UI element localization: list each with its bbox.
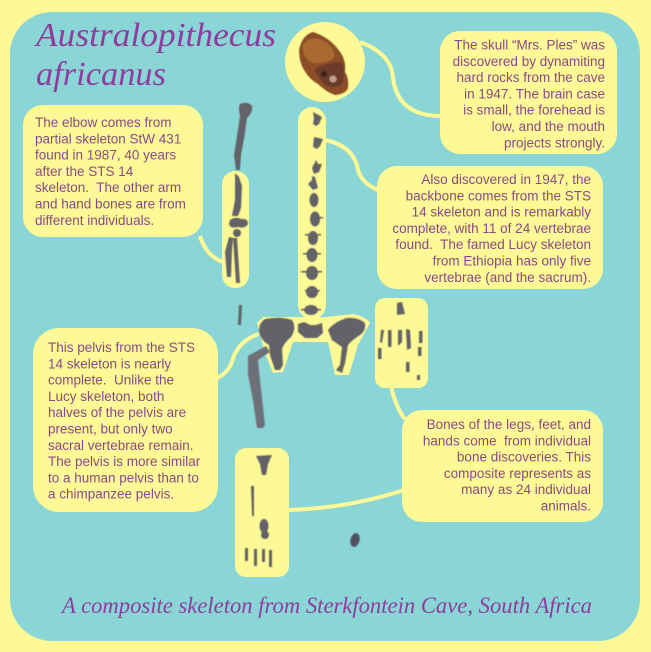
pelvis and femur xyxy=(248,314,370,428)
panel: pelvis text: sacral vertebrae remain. xyxy=(48,438,194,453)
panel: elbow text: skeleton. The other arm xyxy=(35,180,181,195)
connector: skull to skull text xyxy=(360,42,441,116)
panel: backbone text: from Ethiopia has only five xyxy=(433,254,591,268)
connector: arm to elbow text xyxy=(200,236,223,262)
panel: elbow text: found in 1987, 40 years xyxy=(35,148,176,163)
connector: leg bones to leg text xyxy=(288,490,404,510)
title xyxy=(34,17,276,93)
panel: pelvis text: 14 skeleton is nearly xyxy=(48,356,171,371)
panel: pelvis text: to a human pelvis than to xyxy=(48,470,199,485)
panel: elbow text xyxy=(23,105,203,237)
panel: elbow text: The elbow comes from xyxy=(35,115,172,130)
panel: backbone text: complete, with 11 of 24 vertebrae xyxy=(392,221,591,236)
hand bones xyxy=(375,298,428,388)
panel: backbone text: vertebrae (and the sacrum). xyxy=(424,270,591,285)
panel: legs text: bone discoveries. This xyxy=(457,450,591,465)
panel: pelvis text: The pelvis is more similar xyxy=(48,454,201,469)
panel: pelvis text: Lucy skeleton, both xyxy=(48,389,164,404)
panel: legs text: hands come from individual xyxy=(423,433,591,448)
panel: pelvis text: present, but only two xyxy=(48,422,173,436)
skull icon xyxy=(285,22,365,102)
arm bones xyxy=(222,103,252,325)
panel: skull text: low, and the mouth xyxy=(492,119,605,134)
caption: A composite skeleton from Sterkfontein Cave, South Africa xyxy=(60,593,592,618)
foot bone xyxy=(349,532,361,548)
panel: skull text: projects strongly. xyxy=(504,135,605,150)
panel: elbow text: after the STS 14 xyxy=(35,164,134,179)
panel: legs text: Bones of the legs, feet, and xyxy=(427,417,591,432)
panel: pelvis text: halves of the pelvis are xyxy=(48,405,186,420)
panel: skull text: The skull “Mrs. Ples” was xyxy=(454,38,605,52)
panel: pelvis text: a chimpanzee pelvis. xyxy=(48,487,174,502)
panel: legs text xyxy=(402,410,603,522)
panel: skull text: hard rocks from the cave xyxy=(456,70,605,85)
connector: hand bones to leg text xyxy=(391,386,405,419)
panel: skull text: discovered by dynamiting xyxy=(453,54,605,69)
panel: skull text: in 1947. The brain case xyxy=(464,86,605,101)
panel: elbow text: different individuals. xyxy=(35,213,154,228)
title: africanus xyxy=(36,56,166,93)
spine xyxy=(298,107,326,319)
connector: spine to backbone text xyxy=(325,140,380,191)
panel: legs text: composite represents as xyxy=(444,466,591,481)
panel: pelvis text: complete. Unlike the xyxy=(48,373,174,388)
panel: pelvis text: This pelvis from the STS xyxy=(48,340,195,355)
connector: pelvis to pelvis text xyxy=(217,334,259,378)
panel: pelvis text xyxy=(33,328,218,512)
panel: backbone text xyxy=(377,166,603,289)
panel: legs text: animals. xyxy=(541,498,591,514)
panel: skull text xyxy=(440,31,617,154)
panel: elbow text: partial skeleton StW 431 xyxy=(35,131,181,146)
panel: legs text: many as 24 individual xyxy=(461,482,591,497)
leg bones xyxy=(235,448,289,577)
panel: backbone text: Also discovered in 1947, the xyxy=(421,172,591,187)
panel: elbow text: and hand bones are from xyxy=(35,196,186,212)
panel: backbone text: found. The famed Lucy skeleton xyxy=(395,237,591,252)
title: Australopithecus xyxy=(34,17,276,54)
panel: backbone text: 14 skeleton and is remarkably xyxy=(412,205,591,220)
panel: backbone text: backbone comes from the STS xyxy=(406,188,591,203)
panel: skull text: is small, the forehead is xyxy=(463,103,605,118)
